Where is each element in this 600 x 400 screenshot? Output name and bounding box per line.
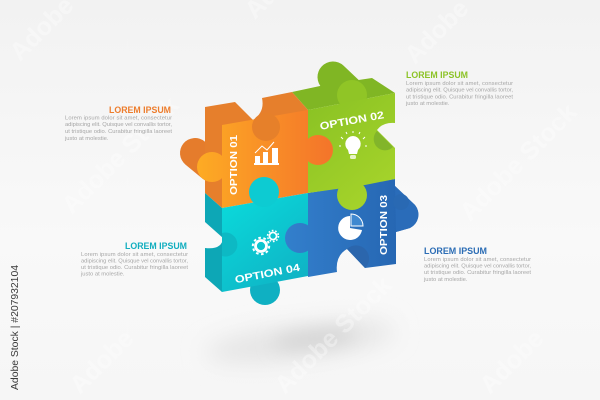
piece: option 02 green [292, 77, 395, 210]
text block: blue: justo at molestie. [423, 277, 468, 283]
label: option 01: OPTION 01 [228, 135, 240, 195]
text block: blue [423, 246, 531, 283]
text block: teal: LOREM IPSUM [125, 241, 187, 252]
text block: orange [64, 105, 172, 142]
puzzle graphic [195, 77, 418, 305]
text block: teal: justo at molestie. [80, 272, 125, 278]
text block: orange: ut tristique odio. Curabitur fringilla laoreet [65, 129, 172, 135]
text block: green: justo at molestie. [405, 101, 450, 107]
watermark text: Adobe [474, 324, 549, 399]
piece: option 03 blue [308, 179, 418, 277]
text block: teal: Lorem ipsum dolor sit amet, consectetur [81, 252, 188, 258]
text block: green: LOREM IPSUM [406, 70, 468, 81]
text block: green: Lorem ipsum dolor sit amet, consectetur [406, 81, 513, 87]
label: option 04: OPTION 04 [234, 262, 301, 286]
text block: teal [80, 241, 188, 278]
icon: bar chart [254, 142, 279, 165]
stock id caption: Adobe Stock | #207932104 [9, 265, 21, 390]
watermark text: Adobe Stock [454, 98, 582, 226]
text block: blue: ut tristique odio. Curabitur fringilla laoreet [424, 270, 531, 276]
text block: blue: adipiscing elit. Quisque vel convallis tortor, [424, 264, 531, 270]
text block: teal: ut tristique odio. Curabitur fringilla laoreet [81, 265, 188, 271]
icon: gears [253, 230, 278, 254]
text block: orange: justo at molestie. [64, 136, 109, 142]
text block: orange: adipiscing elit. Quisque vel convallis tortor, [65, 122, 172, 128]
label: option 03: OPTION 03 [378, 195, 390, 255]
watermark text: Adobe [64, 324, 139, 399]
watermark text: Adobe Stock [269, 271, 397, 399]
icon: light bulb [339, 131, 367, 159]
text block: green: ut tristique odio. Curabitur fringilla laoreet [406, 94, 513, 100]
piece: option 04 teal [205, 177, 308, 305]
floor shadow [204, 314, 396, 370]
text block: orange: LOREM IPSUM [109, 105, 171, 116]
text block: green [405, 70, 513, 107]
text block: blue: LOREM IPSUM [424, 246, 487, 257]
text block: orange: Lorem ipsum dolor sit amet, consectetur [65, 116, 172, 122]
text block: green: adipiscing elit. Quisque vel convallis tortor, [406, 88, 513, 94]
text block: blue: Lorem ipsum dolor sit amet, consectetur [424, 257, 531, 263]
piece: option 01 orange [195, 92, 333, 208]
icon: pie chart [338, 214, 363, 240]
watermark text: Adobe Stock [56, 91, 184, 219]
text block: teal: adipiscing elit. Quisque vel convallis tortor, [81, 258, 188, 264]
blue tab [285, 223, 315, 253]
label: option 02: OPTION 02 [319, 109, 385, 133]
